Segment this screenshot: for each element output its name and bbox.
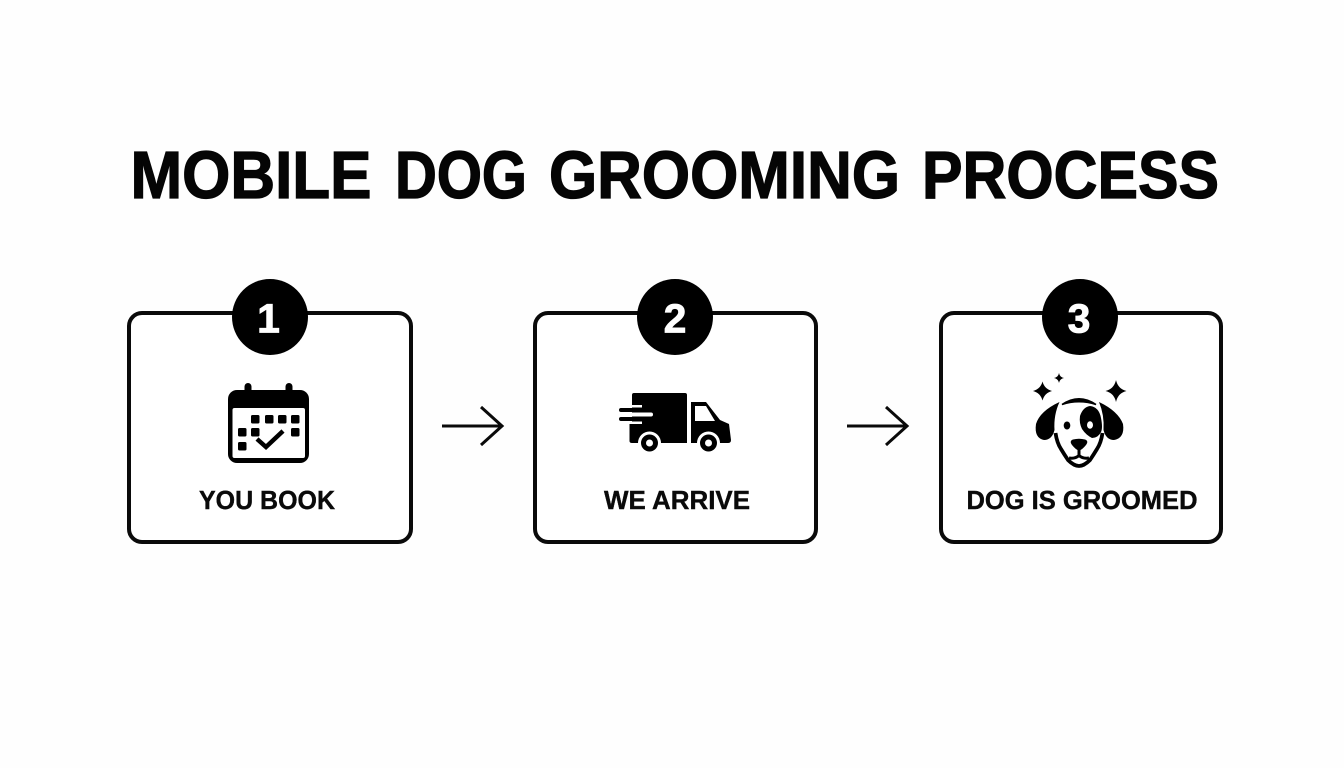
number badge 2: [637, 279, 713, 355]
arrow 1: [442, 407, 502, 445]
arrow 2: [847, 407, 907, 445]
panel: step 2 we arrive: [535, 279, 816, 542]
title: GROOMING: [549, 138, 900, 213]
icon: calendar with check: [228, 383, 309, 463]
number badge 1: 1: [257, 296, 280, 342]
panel: step 1 you book: [129, 279, 411, 542]
title: [130, 138, 1219, 213]
icon: dog with sparkles: [1033, 373, 1126, 466]
number badge 2: 2: [664, 296, 686, 342]
title: DOG: [395, 138, 527, 213]
icon: delivery truck: [619, 393, 731, 454]
card outline 2: [535, 313, 816, 542]
panel: step 3 dog is groomed: [941, 279, 1221, 542]
card outline 1: [129, 313, 411, 542]
label: we arrive: WE ARRIVE: [604, 485, 750, 515]
card outline 3: [941, 313, 1221, 542]
title: MOBILE: [130, 138, 372, 213]
title: PROCESS: [922, 138, 1219, 213]
number badge 3: [1042, 279, 1118, 355]
label: dog is groomed: DOG IS GROOMED: [966, 485, 1198, 515]
label: you book: YOU BOOK: [199, 485, 335, 515]
number badge 1: [232, 279, 308, 355]
number badge 3: 3: [1068, 296, 1090, 342]
